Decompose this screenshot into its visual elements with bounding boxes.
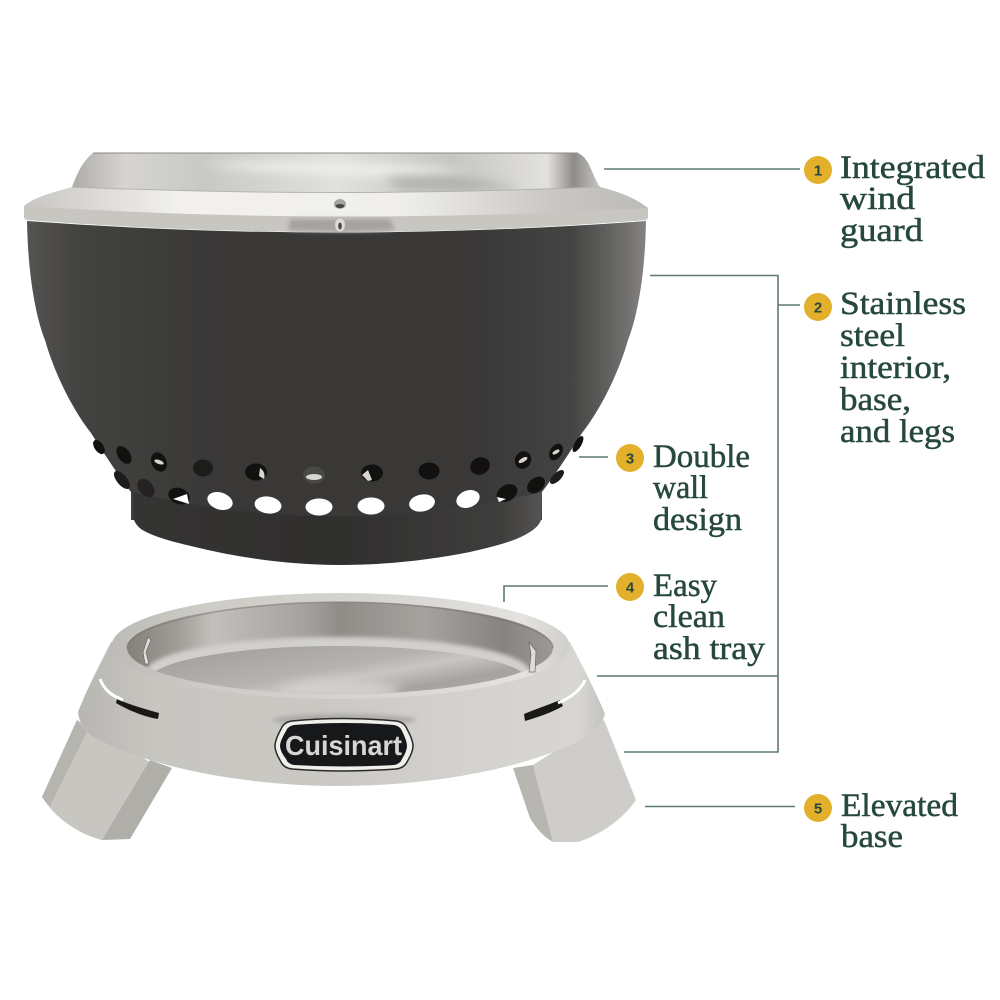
label 1: integrated wind guard: Integrated — [840, 150, 986, 186]
top rim — [112, 593, 570, 699]
badge emboss — [272, 714, 416, 726]
label 4: easy clean ash tray: 4 — [626, 580, 635, 596]
label 5: elevated base — [804, 788, 959, 855]
stand: ring and ash tray — [78, 593, 605, 786]
label 1: integrated wind guard — [804, 150, 986, 249]
left leg outer face — [42, 720, 150, 840]
label 1: integrated wind guard: guard — [840, 213, 924, 249]
hole highlights — [154, 448, 560, 481]
label 2: stainless steel interior, base, and legs: and legs — [840, 414, 955, 450]
label 5: elevated base: 5 — [814, 800, 822, 818]
bowl corner cleanup — [125, 520, 550, 545]
leader line 4 — [504, 586, 608, 602]
outer band — [78, 642, 605, 786]
badge frame — [275, 718, 413, 771]
cuisinart logo badge — [272, 714, 416, 771]
tray clips — [143, 637, 536, 672]
label 4: easy clean ash tray: Easy — [653, 568, 717, 604]
label 5: elevated base: Elevated — [841, 788, 959, 824]
flared rim — [24, 187, 648, 232]
label 3: double wall design: Double — [653, 439, 750, 475]
label 2: stainless steel interior, base, and legs: interior, — [840, 350, 951, 386]
label 3: double wall design: 3 — [626, 450, 634, 468]
label 2: stainless steel interior, base, and legs: Stainless — [840, 286, 966, 322]
label 4: easy clean ash tray — [616, 568, 766, 667]
ventilation holes bottom row — [111, 468, 566, 516]
ventilation holes top row — [91, 434, 586, 484]
label 2: stainless steel interior, base, and legs — [804, 286, 966, 450]
leader line 3 — [579, 456, 608, 458]
right leg outer face — [533, 720, 636, 842]
ash tray floor — [146, 634, 530, 694]
label 5: elevated base: base — [841, 819, 903, 855]
leader line 5 — [645, 806, 795, 808]
ash tray wall — [127, 602, 553, 694]
fire pit bowl — [27, 221, 646, 565]
label 2: stainless steel interior, base, and legs: steel — [840, 318, 905, 354]
stand: legs — [42, 720, 636, 842]
band slots — [116, 699, 159, 719]
label 3: double wall design: design — [653, 502, 742, 538]
label 3: double wall design: wall — [653, 470, 708, 506]
rim screws — [334, 199, 346, 232]
label 2: stainless steel interior, base, and legs: base, — [840, 382, 911, 418]
leader bracket 2 — [597, 276, 800, 752]
wind guard dome — [72, 153, 600, 192]
label 3: double wall design — [616, 439, 750, 538]
right leg inner face — [513, 765, 553, 842]
label 4: easy clean ash tray: clean — [653, 599, 725, 635]
lid: integrated wind guard — [24, 153, 648, 232]
label 4: easy clean ash tray: ash tray — [653, 631, 766, 667]
bowl body — [27, 221, 646, 530]
leader line 1 — [604, 168, 800, 170]
badge plate — [280, 723, 407, 766]
label 2: stainless steel interior, base, and legs: 2 — [814, 300, 822, 316]
left leg inner face — [102, 760, 172, 840]
logo wordmark: Cuisinart — [285, 730, 402, 761]
label 1: integrated wind guard: wind — [840, 181, 916, 217]
label 1: integrated wind guard: 1 — [814, 162, 822, 180]
bowl foot — [133, 492, 542, 565]
